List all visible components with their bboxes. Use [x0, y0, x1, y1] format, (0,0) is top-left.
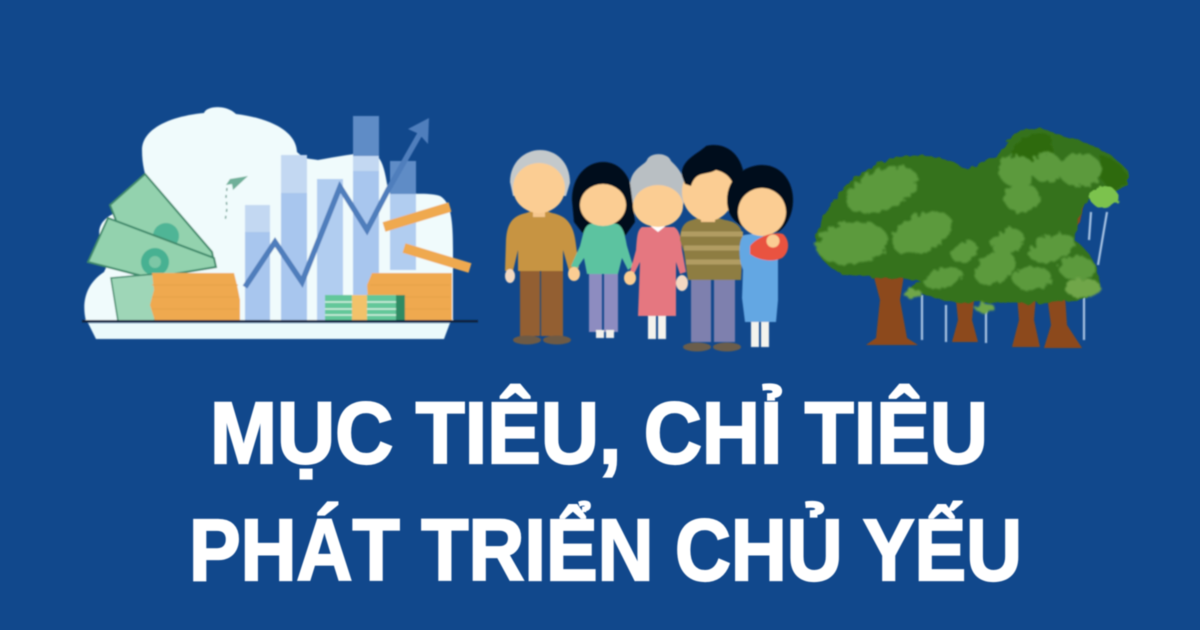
banknotes	[88, 174, 216, 321]
young mother with baby	[727, 165, 793, 347]
baby	[750, 233, 788, 261]
light canopy foliage	[813, 153, 1102, 293]
small flowering branches	[904, 278, 1101, 313]
aerial roots	[922, 212, 1107, 343]
title line 1: MỤC TIÊU, CHỈ TIÊU	[210, 384, 988, 482]
grandmother	[624, 154, 688, 339]
growth trend arrow	[245, 118, 429, 287]
title	[189, 384, 1022, 599]
illustration: banyan trees	[813, 128, 1128, 348]
dark canopy	[816, 128, 1128, 303]
ground line	[82, 320, 478, 322]
white cloud backdrop	[84, 107, 453, 321]
illustration: finance, money and growth chart	[82, 107, 478, 339]
paper plane	[225, 176, 248, 222]
gold coin stacks	[150, 207, 470, 321]
platform	[88, 323, 450, 339]
illustration: family of five	[505, 145, 793, 352]
tree trunks	[866, 195, 1085, 348]
darker crown foliage	[1010, 133, 1128, 190]
grandfather	[505, 150, 579, 344]
bright foliage tuft	[1090, 186, 1118, 208]
young man	[680, 145, 743, 352]
title line 2: PHÁT TRIỂN CHỦ YẾU	[189, 502, 1022, 599]
young woman	[568, 162, 635, 338]
cash stacks	[325, 295, 405, 321]
bar chart	[245, 116, 416, 321]
